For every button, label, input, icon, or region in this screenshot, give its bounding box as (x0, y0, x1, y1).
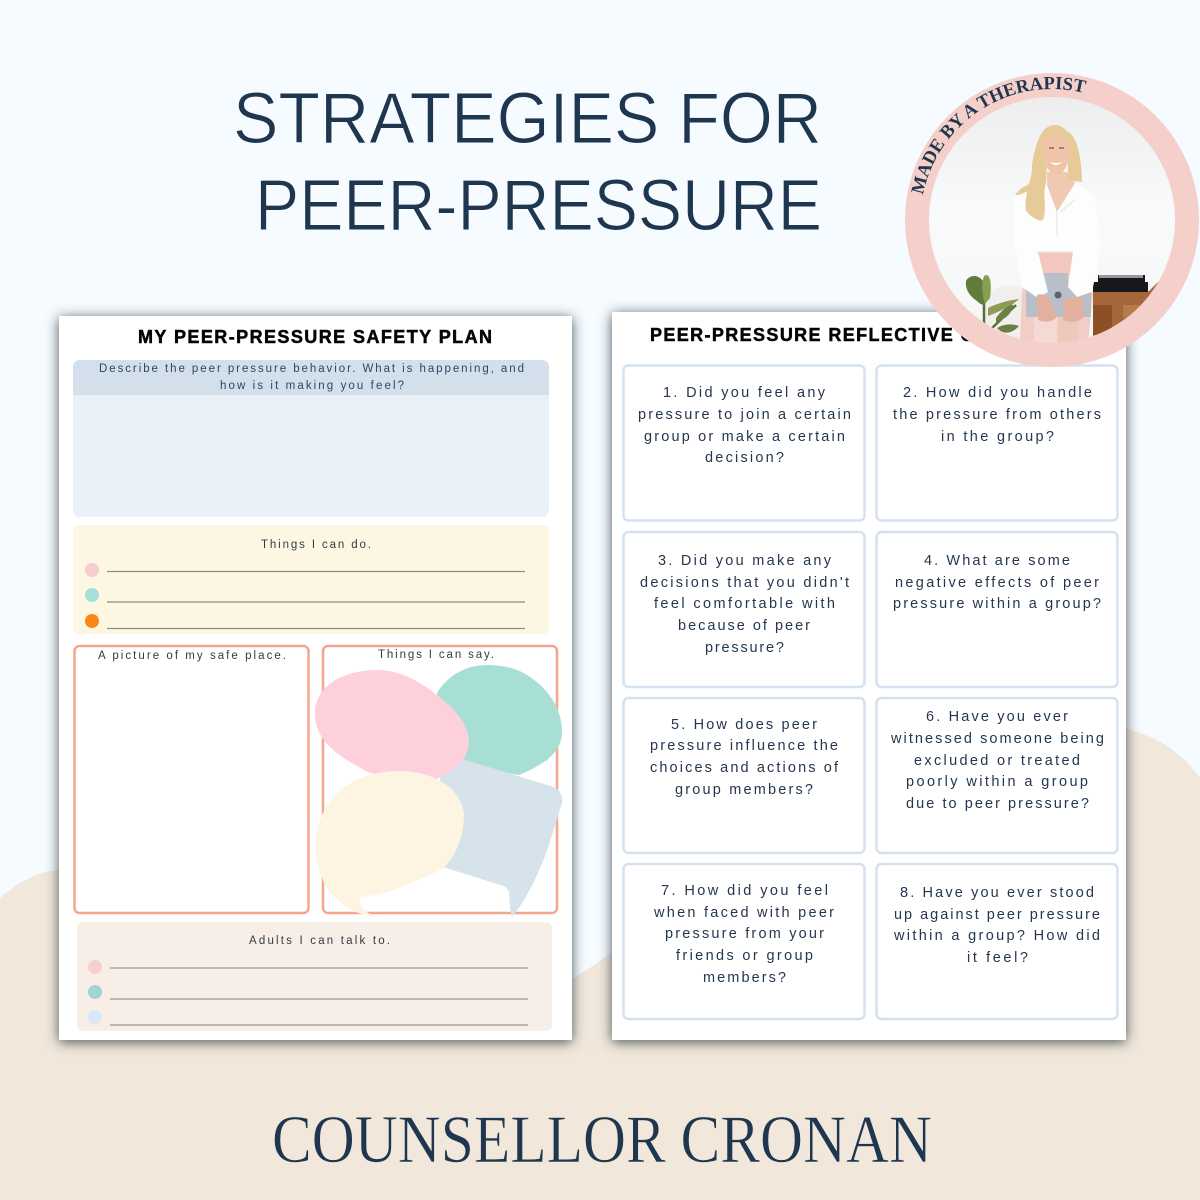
card 3: pressure? (705, 640, 784, 656)
panel: describe behaviour: Describe the peer pressure behavior. What is happening, and (99, 363, 524, 375)
card 3: because of peer (678, 618, 810, 634)
card 7: when faced with peer (653, 905, 834, 921)
title (233, 79, 822, 246)
title: STRATEGIES FOR (233, 79, 822, 159)
card 6: excluded or treated (914, 753, 1080, 769)
card 2: 2. How did you handle (903, 385, 1092, 401)
card 2 (876, 366, 1118, 520)
panel: things I can do (73, 525, 549, 634)
card 5 (624, 698, 864, 853)
panel: describe behaviour (73, 360, 549, 517)
card 4: negative effects of peer (895, 575, 1099, 591)
card 6 (876, 698, 1118, 853)
card 2: in the group? (941, 429, 1054, 445)
plant (966, 275, 1019, 333)
record player (1093, 275, 1148, 292)
card 3: decisions that you didn't (640, 575, 849, 591)
card 1 (624, 366, 864, 520)
panel: describe behaviour: how is it making you feel? (220, 380, 404, 392)
card 8: it feel? (967, 950, 1028, 966)
badge: made by a therapist (905, 73, 1199, 367)
card 4: 4. What are some (924, 553, 1070, 569)
panel: adults I can talk to: Adults I can talk to. (249, 935, 390, 947)
worksheet heading: PEER-PRESSURE REFLECTIVE CARDS (650, 325, 1030, 345)
speech bubble: green (437, 665, 562, 775)
cabinet (1093, 282, 1158, 336)
speech bubble: pink (315, 670, 469, 780)
card 8: up against peer pressure (894, 907, 1100, 923)
card 3 (624, 532, 864, 687)
card 1: group or make a certain (644, 429, 845, 445)
card 6: poorly within a group (906, 774, 1088, 790)
panel: safety plan worksheet (59, 316, 572, 1040)
panel: reflective cards worksheet (612, 312, 1126, 1040)
card 1: pressure to join a certain (638, 407, 851, 423)
card 7: pressure from your (665, 926, 824, 942)
card 5: pressure influence the (650, 738, 838, 754)
card 5: choices and actions of (650, 760, 839, 776)
card 6: 6. Have you ever (926, 709, 1068, 725)
beige wave (0, 726, 1200, 1200)
therapist photo (929, 97, 1175, 346)
badge text: MADE BY A THERAPIST (911, 76, 1087, 195)
hands (1037, 294, 1056, 322)
face (1043, 135, 1070, 175)
panel: things I can say: Things I can say. (378, 649, 494, 661)
card 7: members? (703, 970, 786, 986)
card 5: 5. How does peer (671, 717, 817, 733)
laptop (1026, 273, 1091, 317)
card 3: 3. Did you make any (658, 553, 832, 569)
card 6: witnessed someone being (890, 731, 1104, 747)
card 4 (876, 532, 1118, 687)
worksheet heading: MY PEER-PRESSURE SAFETY PLAN (138, 327, 492, 347)
panel: things I can do: Things I can do. (261, 539, 371, 551)
card 5: group members? (675, 782, 813, 798)
panel: things I can say (315, 646, 562, 917)
hair (1015, 125, 1082, 221)
card 1: decision? (705, 450, 784, 466)
speech bubble: blue (440, 752, 562, 917)
pink trousers (1020, 252, 1093, 345)
panel: adults I can talk to (77, 922, 552, 1031)
card 8 (876, 864, 1118, 1019)
card 7 (624, 864, 864, 1019)
card 4: pressure within a group? (893, 596, 1101, 612)
card 2: the pressure from others (893, 407, 1101, 423)
panel: picture of my safe place (74, 646, 308, 913)
card 6: due to peer pressure? (906, 796, 1089, 812)
brand name: COUNSELLOR CRONAN (272, 1101, 932, 1177)
white blouse (1023, 252, 1094, 298)
neck (1047, 172, 1075, 212)
sofa behind plant (986, 286, 1022, 338)
panel: picture of my safe place: A picture of my safe place. (98, 650, 286, 662)
card 1: 1. Did you feel any (663, 385, 826, 401)
card 8: within a group? How did (893, 928, 1100, 944)
card 3: feel comfortable with (654, 596, 835, 612)
card 7: friends or group (676, 948, 813, 964)
card 7: 7. How did you feel (661, 883, 828, 899)
card 8: 8. Have you ever stood (900, 885, 1094, 901)
speech bubble: cream (316, 771, 464, 917)
title: PEER-PRESSURE (255, 166, 822, 246)
